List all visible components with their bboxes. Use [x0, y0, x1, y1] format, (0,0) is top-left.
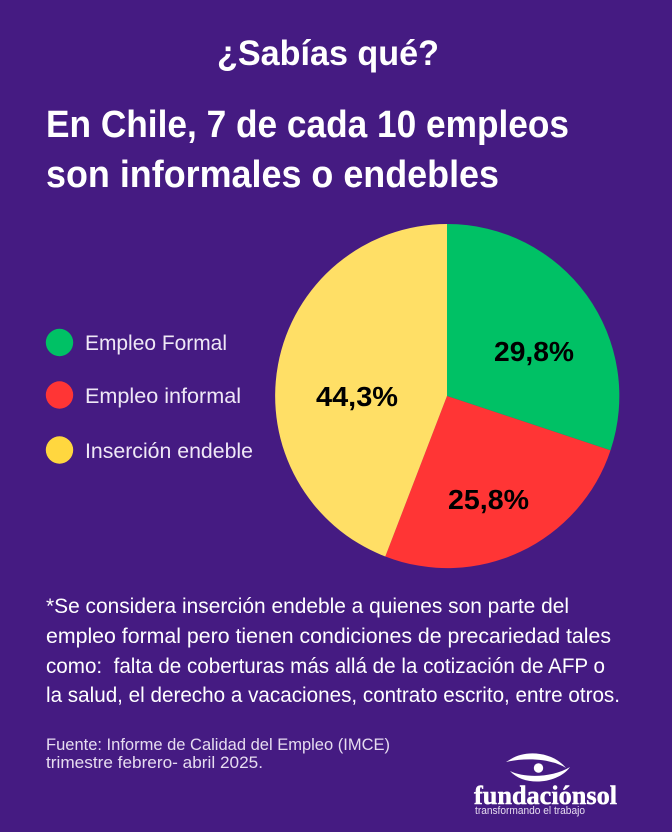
- slice: Empleo informal 25,8%: [385, 396, 610, 568]
- footnote: la salud, el derecho a vacaciones, contrato escrito, entre otros.: [46, 684, 620, 707]
- wordmark: fundaciónsol: [474, 781, 617, 810]
- heading: En Chile, 7 de cada 10 empleos: [46, 104, 569, 146]
- slice: Inserción endeble 44,3%: [275, 224, 447, 556]
- pie chart: [275, 224, 619, 568]
- legend item: Empleo Formal: Empleo Formal: [85, 332, 227, 355]
- value labels: [316, 336, 574, 515]
- source: [46, 736, 390, 772]
- icon: eye: [506, 753, 570, 782]
- title: ¿Sabías qué?: [217, 34, 439, 73]
- footnote: [46, 595, 620, 707]
- value labels: 25,8%: [448, 484, 529, 515]
- logo: fundaciónsol: [474, 753, 617, 817]
- footnote: *Se considera inserción endeble a quienes son parte del: [46, 595, 569, 618]
- source: trimestre febrero- abril 2025.: [46, 754, 263, 772]
- legend item: Empleo informal: [46, 381, 241, 409]
- value labels: 29,8%: [494, 336, 574, 367]
- footnote: empleo formal pero tienen condiciones de precariedad tales: [46, 625, 611, 648]
- heading: son informales o endebles: [46, 154, 499, 196]
- source: Fuente: Informe de Calidad del Empleo (IMCE): [46, 736, 390, 754]
- slice: Empleo Formal 29,8%: [447, 224, 619, 450]
- legend item: Empleo Formal: [46, 329, 227, 356]
- heading: [46, 104, 569, 196]
- tagline: transformando el trabajo: [475, 805, 585, 817]
- legend item: Empleo informal: Empleo informal: [85, 385, 241, 408]
- footnote: como: falta de coberturas más allá de la cotización de AFP o: [46, 655, 605, 678]
- legend item: Inserción endeble: Inserción endeble: [85, 440, 253, 463]
- legend: [46, 329, 253, 464]
- value labels: 44,3%: [316, 381, 398, 412]
- legend item: Inserción endeble: [46, 436, 253, 464]
